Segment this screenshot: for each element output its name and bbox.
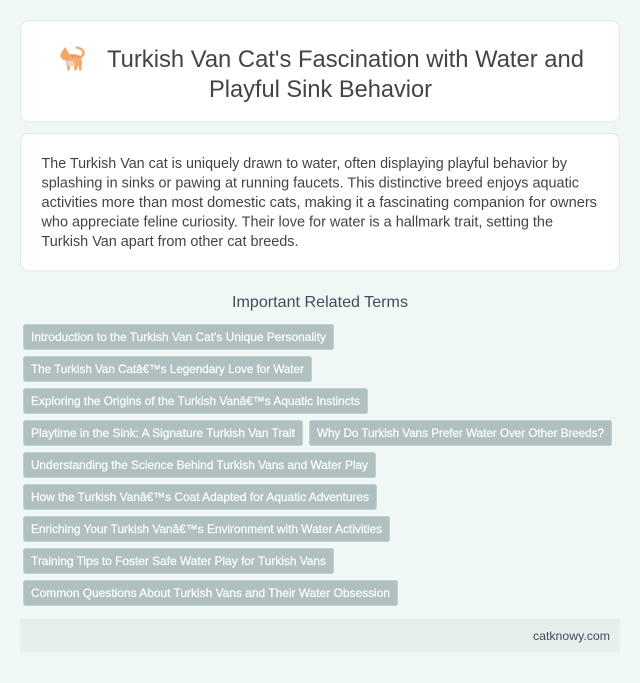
text block: description: splashing in sinks or pawing at running faucets. This distinctive breed enjoys aquatic [42, 176, 579, 192]
panel: description [20, 134, 620, 271]
tag: science: Understanding the Science Behind Turkish Vans and Water Play [31, 458, 368, 472]
tag: introduction: Introduction to the Turkish Van Cat's Unique Personality [31, 330, 326, 344]
tag: origins [24, 388, 368, 414]
tag: legendary love [24, 356, 312, 382]
tag: common questions [24, 580, 398, 606]
tag: coat [24, 484, 376, 510]
tag: environment [24, 516, 390, 542]
tag: legendary love: The Turkish Van Catâ€™s Legendary Love for Water [31, 362, 304, 376]
tag: playtime [24, 420, 302, 446]
tag: why water [310, 420, 612, 446]
tag: origins: Exploring the Origins of the Turkish Vanâ€™s Aquatic Instincts [31, 394, 360, 408]
panel: related term tags [24, 324, 612, 606]
panel: title card [20, 21, 620, 122]
title: Playful Sink Behavior [209, 76, 432, 103]
text block: description [40, 156, 597, 250]
tag: training [24, 548, 334, 574]
tag: playtime: Playtime in the Sink: A Signature Turkish Van Trait [31, 426, 296, 440]
title: Turkish Van Cat's Fascination with Water and [107, 46, 584, 73]
tag: introduction [24, 324, 334, 350]
tag: coat: How the Turkish Vanâ€™s Coat Adapted for Aquatic Adventures [31, 490, 369, 504]
text block: description: who appreciate feline curiosity. Their love for water is a hallmark trait, setting the [40, 214, 553, 230]
text block: description: Turkish Van apart from other cat breeds. [42, 234, 298, 250]
footer [20, 619, 620, 652]
tag: why water: Why Do Turkish Vans Prefer Water Over Other Breeds? [317, 426, 604, 440]
tag: training: Training Tips to Foster Safe Water Play for Turkish Vans [31, 554, 326, 568]
icon: orange cat [60, 47, 84, 70]
text block: description: activities more than most domestic cats, making it a fascinating companion for owners [42, 195, 597, 211]
text block: description: The Turkish Van cat is uniquely drawn to water, often displaying playful behavior by [42, 156, 568, 172]
title [107, 46, 584, 103]
tag: common questions: Common Questions About Turkish Vans and Their Water Obsession [31, 586, 390, 600]
tag: science [24, 452, 376, 478]
tag: environment: Enriching Your Turkish Vanâ€™s Environment with Water Activities [31, 522, 382, 536]
footer: source: catknowy.com [533, 629, 610, 643]
heading: related terms: Important Related Terms [232, 294, 408, 311]
